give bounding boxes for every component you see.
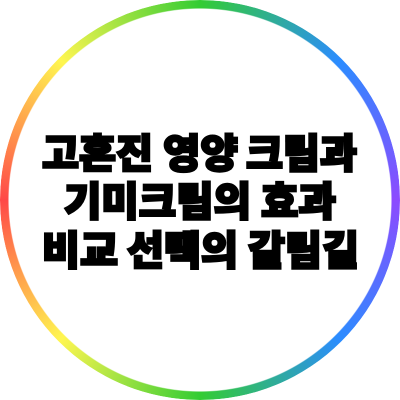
title line 1: 영양 — [163, 132, 238, 176]
title line 3: 갈림길 — [248, 230, 359, 274]
title line 3: 선택의 — [127, 230, 238, 274]
title line 2: 기미크림의 — [64, 180, 251, 224]
title line 2: 효과 — [261, 180, 336, 224]
title line 1: 크림과 — [246, 132, 357, 176]
title line 1 — [42, 132, 357, 176]
title line 3 — [42, 230, 359, 274]
title line 2 — [64, 180, 336, 224]
title line 3: 비교 — [42, 230, 118, 274]
title line 1: 고혼진 — [42, 132, 153, 176]
